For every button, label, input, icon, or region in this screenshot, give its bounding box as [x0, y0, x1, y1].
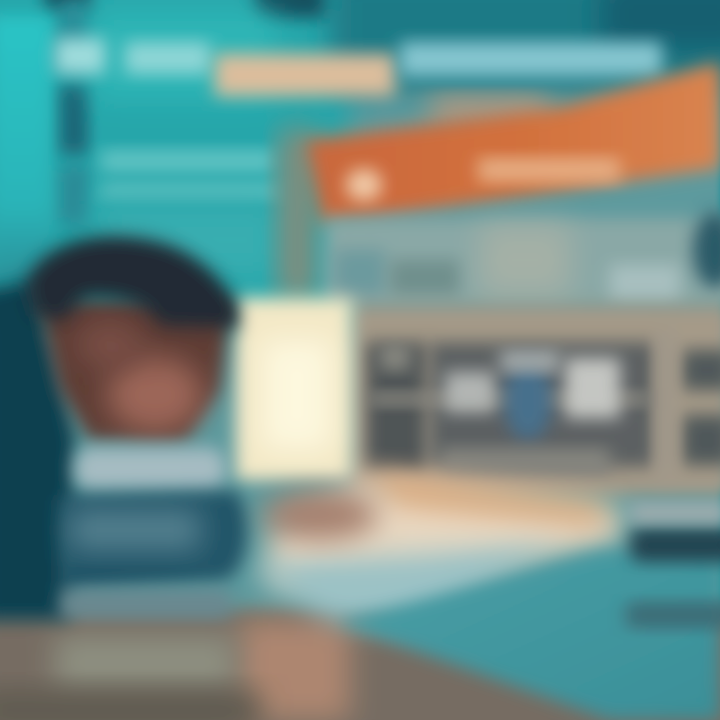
panel: orange banner [305, 62, 720, 224]
pen on notebook [625, 602, 720, 628]
lower sleeve band [60, 590, 230, 618]
hand [262, 490, 378, 540]
glowing paper on desk [250, 472, 620, 625]
desk surface [0, 610, 720, 720]
shirt sleeve [75, 448, 225, 490]
face [38, 300, 232, 440]
banner text [478, 158, 620, 182]
background shelves upper [325, 212, 720, 306]
banner icon [346, 169, 382, 201]
hair [25, 236, 239, 328]
person [0, 236, 378, 620]
glowing lamp [236, 298, 352, 480]
left window panels [0, 0, 314, 300]
body [0, 280, 75, 620]
shelf unit [352, 305, 720, 495]
device on right [630, 528, 720, 562]
title: blurred white and orange words [55, 38, 662, 122]
teal notebook [335, 503, 720, 720]
